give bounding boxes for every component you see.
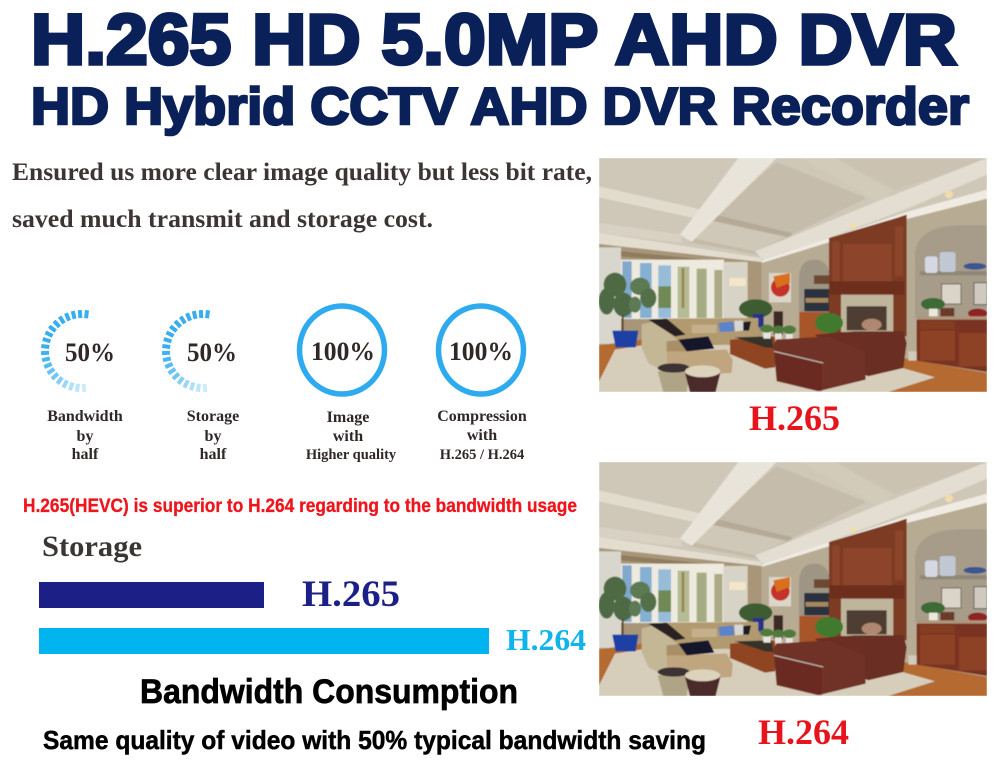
photo: room H.265 [599,158,987,392]
value 100%: 100% [311,337,375,366]
intro text [12,159,592,233]
stat: storage by half [162,310,239,463]
caption image: Image [327,409,369,426]
main title: H.265 HD 5.0MP AHD DVR [31,1,957,80]
label H.264: H.264 [506,622,586,657]
icon: full ring compression [438,306,524,394]
caption compression: Compression [437,408,527,425]
intro text: Ensured us more clear image quality but less bit rate, [12,159,592,186]
stat: image with higher quality [300,306,397,463]
storage heading: Storage [42,530,142,563]
bar H.264 [39,628,489,654]
caption storage: Storage [187,408,239,425]
caption image: with [333,428,363,445]
red comparison statement: H.265(HEVC) is superior to H.264 regarding to the bandwidth usage [23,496,577,517]
bandwidth consumption heading: Bandwidth Consumption [140,673,518,711]
label H.265 photo: H.265 [749,398,840,438]
stat: bandwidth by half [41,310,123,463]
caption compression: with [467,427,497,444]
caption bandwidth: Bandwidth [47,408,123,425]
saving note: Same quality of video with 50% typical bandwidth saving [43,725,706,755]
icon: dashed ring storage [162,310,208,392]
label H.265: H.265 [302,574,400,615]
label H.264 photo: H.264 [758,712,849,752]
bar H.265 [39,582,264,608]
stat: compression [437,306,527,463]
value 50%: 50% [65,338,115,367]
caption image: Higher quality [306,447,397,463]
icon: full ring image [300,306,384,394]
photo: room H.264 [599,462,987,696]
caption storage: half [200,446,227,463]
storage bar chart [39,530,586,657]
value 100%: 100% [449,337,513,366]
caption storage: by [205,428,221,445]
caption bandwidth: by [77,428,93,445]
caption compression: H.265 / H.264 [440,447,524,463]
value 50%: 50% [187,338,237,367]
intro text: saved much transmit and storage cost. [12,206,433,233]
caption bandwidth: half [72,446,99,463]
icon: dashed ring bandwidth [41,310,87,392]
subtitle: HD Hybrid CCTV AHD DVR Recorder [31,78,969,136]
